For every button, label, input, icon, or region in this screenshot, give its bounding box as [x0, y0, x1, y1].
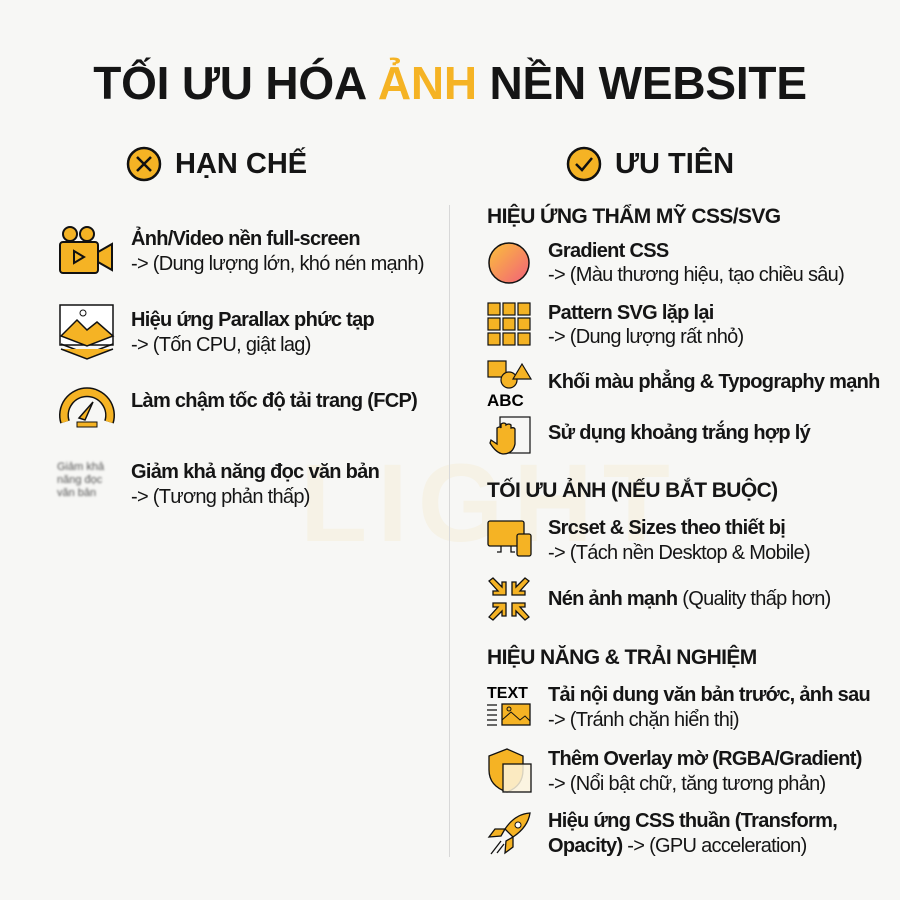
item: parallax — [59, 304, 374, 360]
heading: hạn chế — [126, 146, 307, 182]
item: video — [59, 226, 424, 275]
icon: camera — [59, 226, 113, 274]
item: whitespace: Sử dụng khoảng trắng hợp lý — [548, 422, 810, 444]
heading: ưu tiên — [566, 146, 734, 182]
icon: compress arrows — [488, 577, 530, 621]
panel: ưu tiên — [487, 204, 880, 857]
item: compress — [488, 577, 831, 621]
item: gauge — [59, 387, 417, 428]
icon: blurred text: văn bản — [57, 487, 96, 499]
heading: ưu tiên: ƯU TIÊN — [615, 148, 734, 180]
item: pattern — [487, 302, 744, 348]
item: overlay: -> (Nổi bật chữ, tăng tương phản) — [548, 773, 826, 795]
item: text first: -> (Tránh chặn hiển thị) — [548, 709, 739, 731]
item: pattern: Pattern SVG lặp lại — [548, 302, 714, 324]
item: gradient: Gradient CSS — [548, 240, 669, 262]
icon: text image — [487, 685, 531, 726]
item: gradient: -> (Màu thương hiệu, tạo chiều sâu) — [548, 264, 844, 286]
item: css transform — [488, 810, 837, 857]
icon: devices — [487, 520, 532, 557]
item: readability — [56, 460, 379, 508]
item: overlay: Thêm Overlay mờ (RGBA/Gradient) — [548, 748, 862, 770]
item: parallax: Hiệu ứng Parallax phức tạp — [131, 309, 374, 331]
icon: rocket — [488, 812, 531, 854]
item: text first — [487, 684, 870, 731]
item: srcset — [487, 517, 810, 564]
icon: blurred text — [56, 460, 106, 499]
item: flat blocks — [487, 360, 880, 410]
icon: layers — [59, 304, 114, 360]
item: css transform: Opacity) -> (GPU acceleration) — [548, 835, 807, 857]
item: compress: Nén ảnh mạnh (Quality thấp hơn) — [548, 588, 831, 610]
item: css transform: Hiệu ứng CSS thuần (Transform, — [548, 810, 837, 832]
item: flat blocks: Khối màu phẳng & Typography mạnh — [548, 371, 880, 393]
icon: check circle — [566, 146, 602, 182]
icon: shield overlay — [488, 748, 532, 793]
heading: tối ưu ảnh: TỐI ƯU ẢNH (NẾU BẮT BUỘC) — [487, 479, 778, 502]
item: pattern: -> (Dung lượng rất nhỏ) — [548, 326, 744, 348]
heading: hiệu năng: HIỆU NĂNG & TRẢI NGHIỆM — [487, 646, 757, 669]
item: gradient — [488, 240, 844, 286]
icon: shapes abc — [487, 360, 532, 410]
icon: text image: TEXT — [487, 685, 528, 702]
panel: hạn chế — [56, 226, 424, 508]
item: gauge: Làm chậm tốc độ tải trang (FCP) — [131, 390, 417, 412]
icon: shapes abc: ABC — [487, 391, 524, 410]
heading: css/svg: HIỆU ỨNG THẨM MỸ CSS/SVG — [487, 205, 781, 228]
item: readability: Giảm khả năng đọc văn bản — [131, 461, 379, 483]
watermark: LIGHT — [300, 442, 680, 565]
icon: blurred text: năng đọc — [57, 474, 102, 486]
item: srcset: Srcset & Sizes theo thiết bị — [548, 517, 785, 539]
item: video: Ảnh/Video nền full-screen — [131, 228, 360, 250]
icon: hand — [489, 416, 531, 455]
item: readability: -> (Tương phản thấp) — [131, 486, 310, 508]
item: overlay — [488, 748, 862, 795]
icon: speedometer — [59, 387, 115, 428]
icon: blurred text: Giảm khả — [57, 461, 104, 473]
item: video: -> (Dung lượng lớn, khó nén mạnh) — [131, 253, 424, 275]
heading: hạn chế: HẠN CHẾ — [175, 148, 307, 180]
item: parallax: -> (Tốn CPU, giật lag) — [131, 334, 311, 356]
icon: gradient circle — [488, 242, 530, 284]
icon: x circle — [126, 146, 162, 182]
item: text first: Tải nội dung văn bản trước, ảnh sau — [548, 684, 870, 706]
title: TỐI ƯU HÓA ẢNH NỀN WEBSITE — [93, 57, 807, 109]
item: srcset: -> (Tách nền Desktop & Mobile) — [548, 542, 810, 564]
item: whitespace — [489, 416, 811, 455]
icon: pattern grid — [487, 302, 531, 346]
